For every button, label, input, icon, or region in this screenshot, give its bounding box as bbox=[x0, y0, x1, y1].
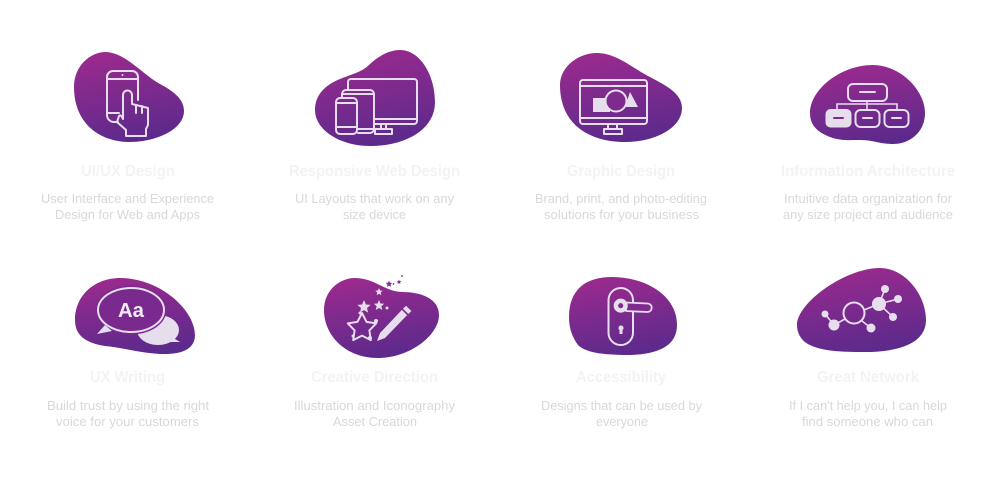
description bbox=[47, 398, 209, 429]
blob background bbox=[324, 278, 439, 358]
text: Aa glyphs: Aa bbox=[118, 300, 145, 322]
description bbox=[41, 191, 214, 222]
description: Brand, print, and photo-editing bbox=[535, 191, 707, 206]
icon: monitor, tablet and phone bbox=[336, 79, 417, 134]
title: UX Writing bbox=[90, 369, 165, 386]
description: Design for Web and Apps bbox=[55, 207, 200, 222]
icon: monitor with shapes bbox=[580, 80, 647, 134]
card: Responsive Web Design bbox=[289, 50, 460, 222]
description bbox=[295, 191, 454, 222]
description: size device bbox=[343, 207, 406, 222]
description: Build trust by using the right bbox=[47, 398, 209, 413]
description bbox=[789, 398, 947, 429]
description bbox=[294, 398, 455, 429]
description: Intuitive data organization for bbox=[784, 191, 953, 206]
card: Information Architecture bbox=[781, 65, 955, 222]
card: UI/UX Design bbox=[41, 52, 214, 222]
description: If I can't help you, I can help bbox=[789, 398, 947, 413]
title: Responsive Web Design bbox=[289, 163, 460, 180]
blob background bbox=[75, 278, 195, 354]
icon: phone with pointing hand bbox=[107, 71, 148, 136]
icon: stars and pencil bbox=[348, 275, 411, 341]
card: Creative Direction bbox=[294, 275, 455, 429]
card: UX Writing bbox=[47, 278, 209, 429]
blob background bbox=[315, 50, 435, 146]
blob background bbox=[569, 277, 677, 355]
description: User Interface and Experience bbox=[41, 191, 214, 206]
description: find someone who can bbox=[802, 414, 933, 429]
description bbox=[535, 191, 707, 222]
description bbox=[783, 191, 953, 222]
description: any size project and audience bbox=[783, 207, 953, 222]
title: Creative Direction bbox=[311, 369, 438, 386]
title: Great Network bbox=[817, 369, 919, 386]
description: Asset Creation bbox=[333, 414, 417, 429]
blob background bbox=[560, 53, 682, 142]
blob background bbox=[74, 52, 184, 142]
title: Accessibility bbox=[576, 369, 666, 386]
icon: network nodes bbox=[822, 285, 902, 332]
icon: speech bubbles bbox=[96, 286, 180, 345]
icon: hierarchy diagram bbox=[826, 84, 908, 128]
description: everyone bbox=[596, 414, 648, 429]
title: Information Architecture bbox=[781, 163, 955, 180]
description: solutions for your business bbox=[544, 207, 699, 222]
blob background bbox=[797, 268, 926, 352]
description bbox=[541, 398, 702, 429]
description: Illustration and Iconography bbox=[294, 398, 455, 413]
title: Graphic Design bbox=[567, 163, 675, 180]
card: Accessibility bbox=[541, 277, 702, 429]
blob background bbox=[810, 65, 925, 144]
card: Great Network bbox=[789, 268, 947, 429]
card: Graphic Design bbox=[535, 53, 707, 222]
description: voice for your customers bbox=[56, 414, 199, 429]
icon: door handle bbox=[608, 288, 652, 345]
title: UI/UX Design bbox=[81, 163, 175, 180]
description: UI Layouts that work on any bbox=[295, 191, 454, 206]
description: Designs that can be used by bbox=[541, 398, 702, 413]
